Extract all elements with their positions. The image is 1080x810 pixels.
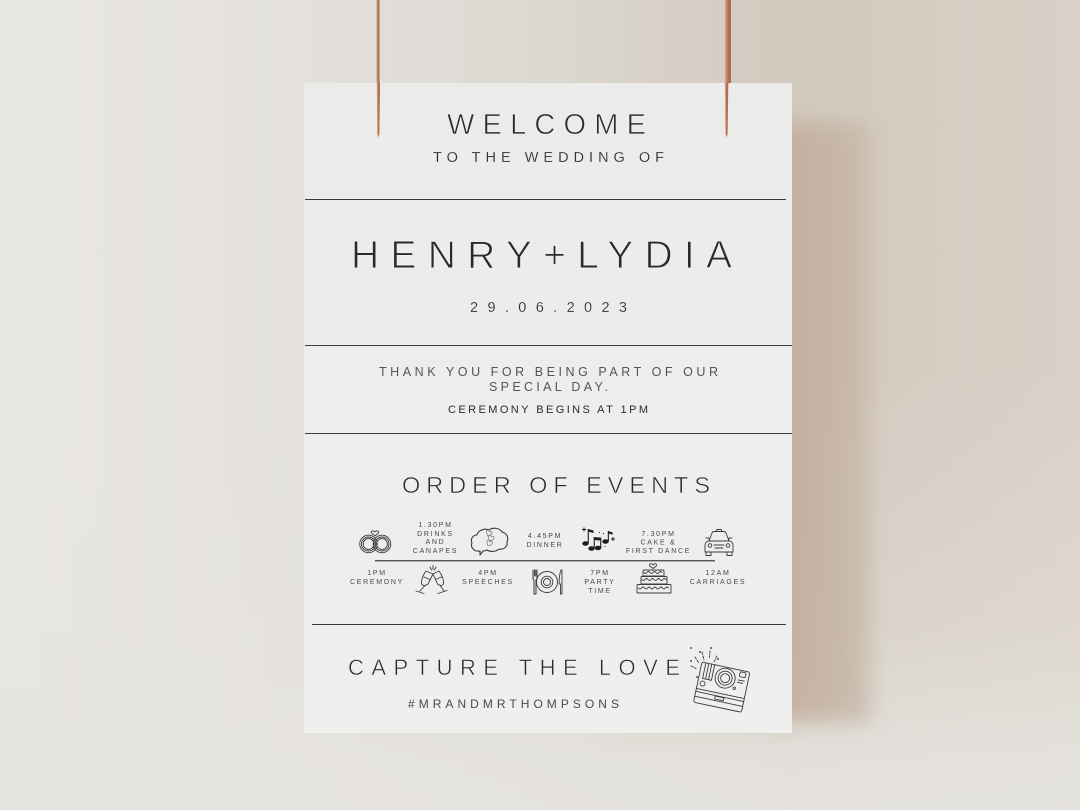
heading: welcome: WELCOME	[447, 109, 646, 141]
heading: capture the love: CAPTURE THE LOVE	[348, 655, 680, 680]
heading: order of events: ORDER OF EVENTS	[402, 472, 710, 498]
label: 7.30pm cake and first dance: FIRST DANCE	[626, 548, 691, 555]
divider	[305, 433, 792, 434]
label: 1.30pm drinks and canapes: CANAPES	[413, 548, 458, 555]
label: 4.45pm dinner: DINNER	[526, 542, 564, 549]
label: 7pm party time: 7PM	[590, 570, 610, 577]
label: 4.45pm dinner: 4.45PM	[528, 533, 562, 540]
label: 1.30pm drinks and canapes	[413, 522, 458, 555]
label: 4pm speeches: 4PM	[478, 570, 498, 577]
hashtag: #MRANDMRTHOMPSONS	[408, 697, 619, 711]
date: 29.06.2023	[470, 300, 627, 316]
label: 1.30pm drinks and canapes: DRINKS	[417, 531, 454, 538]
icon: car	[705, 530, 733, 556]
label: 7pm party time: TIME	[588, 588, 612, 595]
label: 7.30pm cake and first dance: CAKE &	[641, 540, 676, 546]
label: 4.45pm dinner	[526, 533, 564, 549]
text block: ceremony time: CEREMONY BEGINS AT 1PM	[448, 404, 648, 416]
icon: wedding rings	[360, 531, 391, 553]
label: 4pm speeches: SPEECHES	[462, 579, 514, 586]
panel: welcome sign	[304, 83, 792, 733]
label: 7.30pm cake and first dance: 7.30PM	[641, 531, 676, 538]
label: 12am carriages	[690, 570, 746, 586]
icon: thought cloud with hearts	[471, 528, 508, 555]
rope front: left	[377, 83, 380, 138]
divider	[305, 345, 792, 346]
label: 1pm ceremony	[350, 570, 404, 586]
label: 7pm party time: PARTY	[584, 579, 616, 586]
label: 12am carriages: 12AM	[705, 570, 731, 577]
rope behind the sign: left	[376, 0, 380, 84]
label: 7pm party time	[584, 570, 616, 595]
text block: thank you: THANK YOU FOR BEING PART OF OUR	[379, 365, 718, 379]
divider	[312, 624, 786, 625]
icon: tiered cake	[637, 564, 671, 593]
label: 7.30pm cake and first dance	[626, 531, 691, 555]
divider	[305, 199, 786, 200]
icon: music notes	[582, 528, 615, 551]
text block: thank you	[379, 365, 718, 394]
subheading: to the wedding of: TO THE WEDDING OF	[433, 150, 664, 166]
timeline axis	[375, 560, 715, 561]
icon: instant camera	[690, 647, 750, 712]
icon: champagne flutes	[416, 566, 447, 594]
text block: thank you: SPECIAL DAY.	[489, 380, 608, 394]
icon: plate and cutlery	[533, 570, 562, 594]
timeline	[350, 522, 746, 595]
title: couple names: HENRY+LYDIA	[351, 234, 732, 277]
rope behind the sign: right	[725, 0, 731, 84]
label: 1.30pm drinks and canapes: 1.30PM	[418, 522, 453, 529]
label: 4pm speeches	[462, 570, 514, 586]
label: 1pm ceremony: 1PM	[367, 570, 387, 577]
label: 1pm ceremony: CEREMONY	[350, 579, 404, 586]
label: 12am carriages: CARRIAGES	[690, 579, 746, 586]
label: 1.30pm drinks and canapes: AND	[426, 539, 445, 546]
rope front: right	[725, 83, 728, 138]
